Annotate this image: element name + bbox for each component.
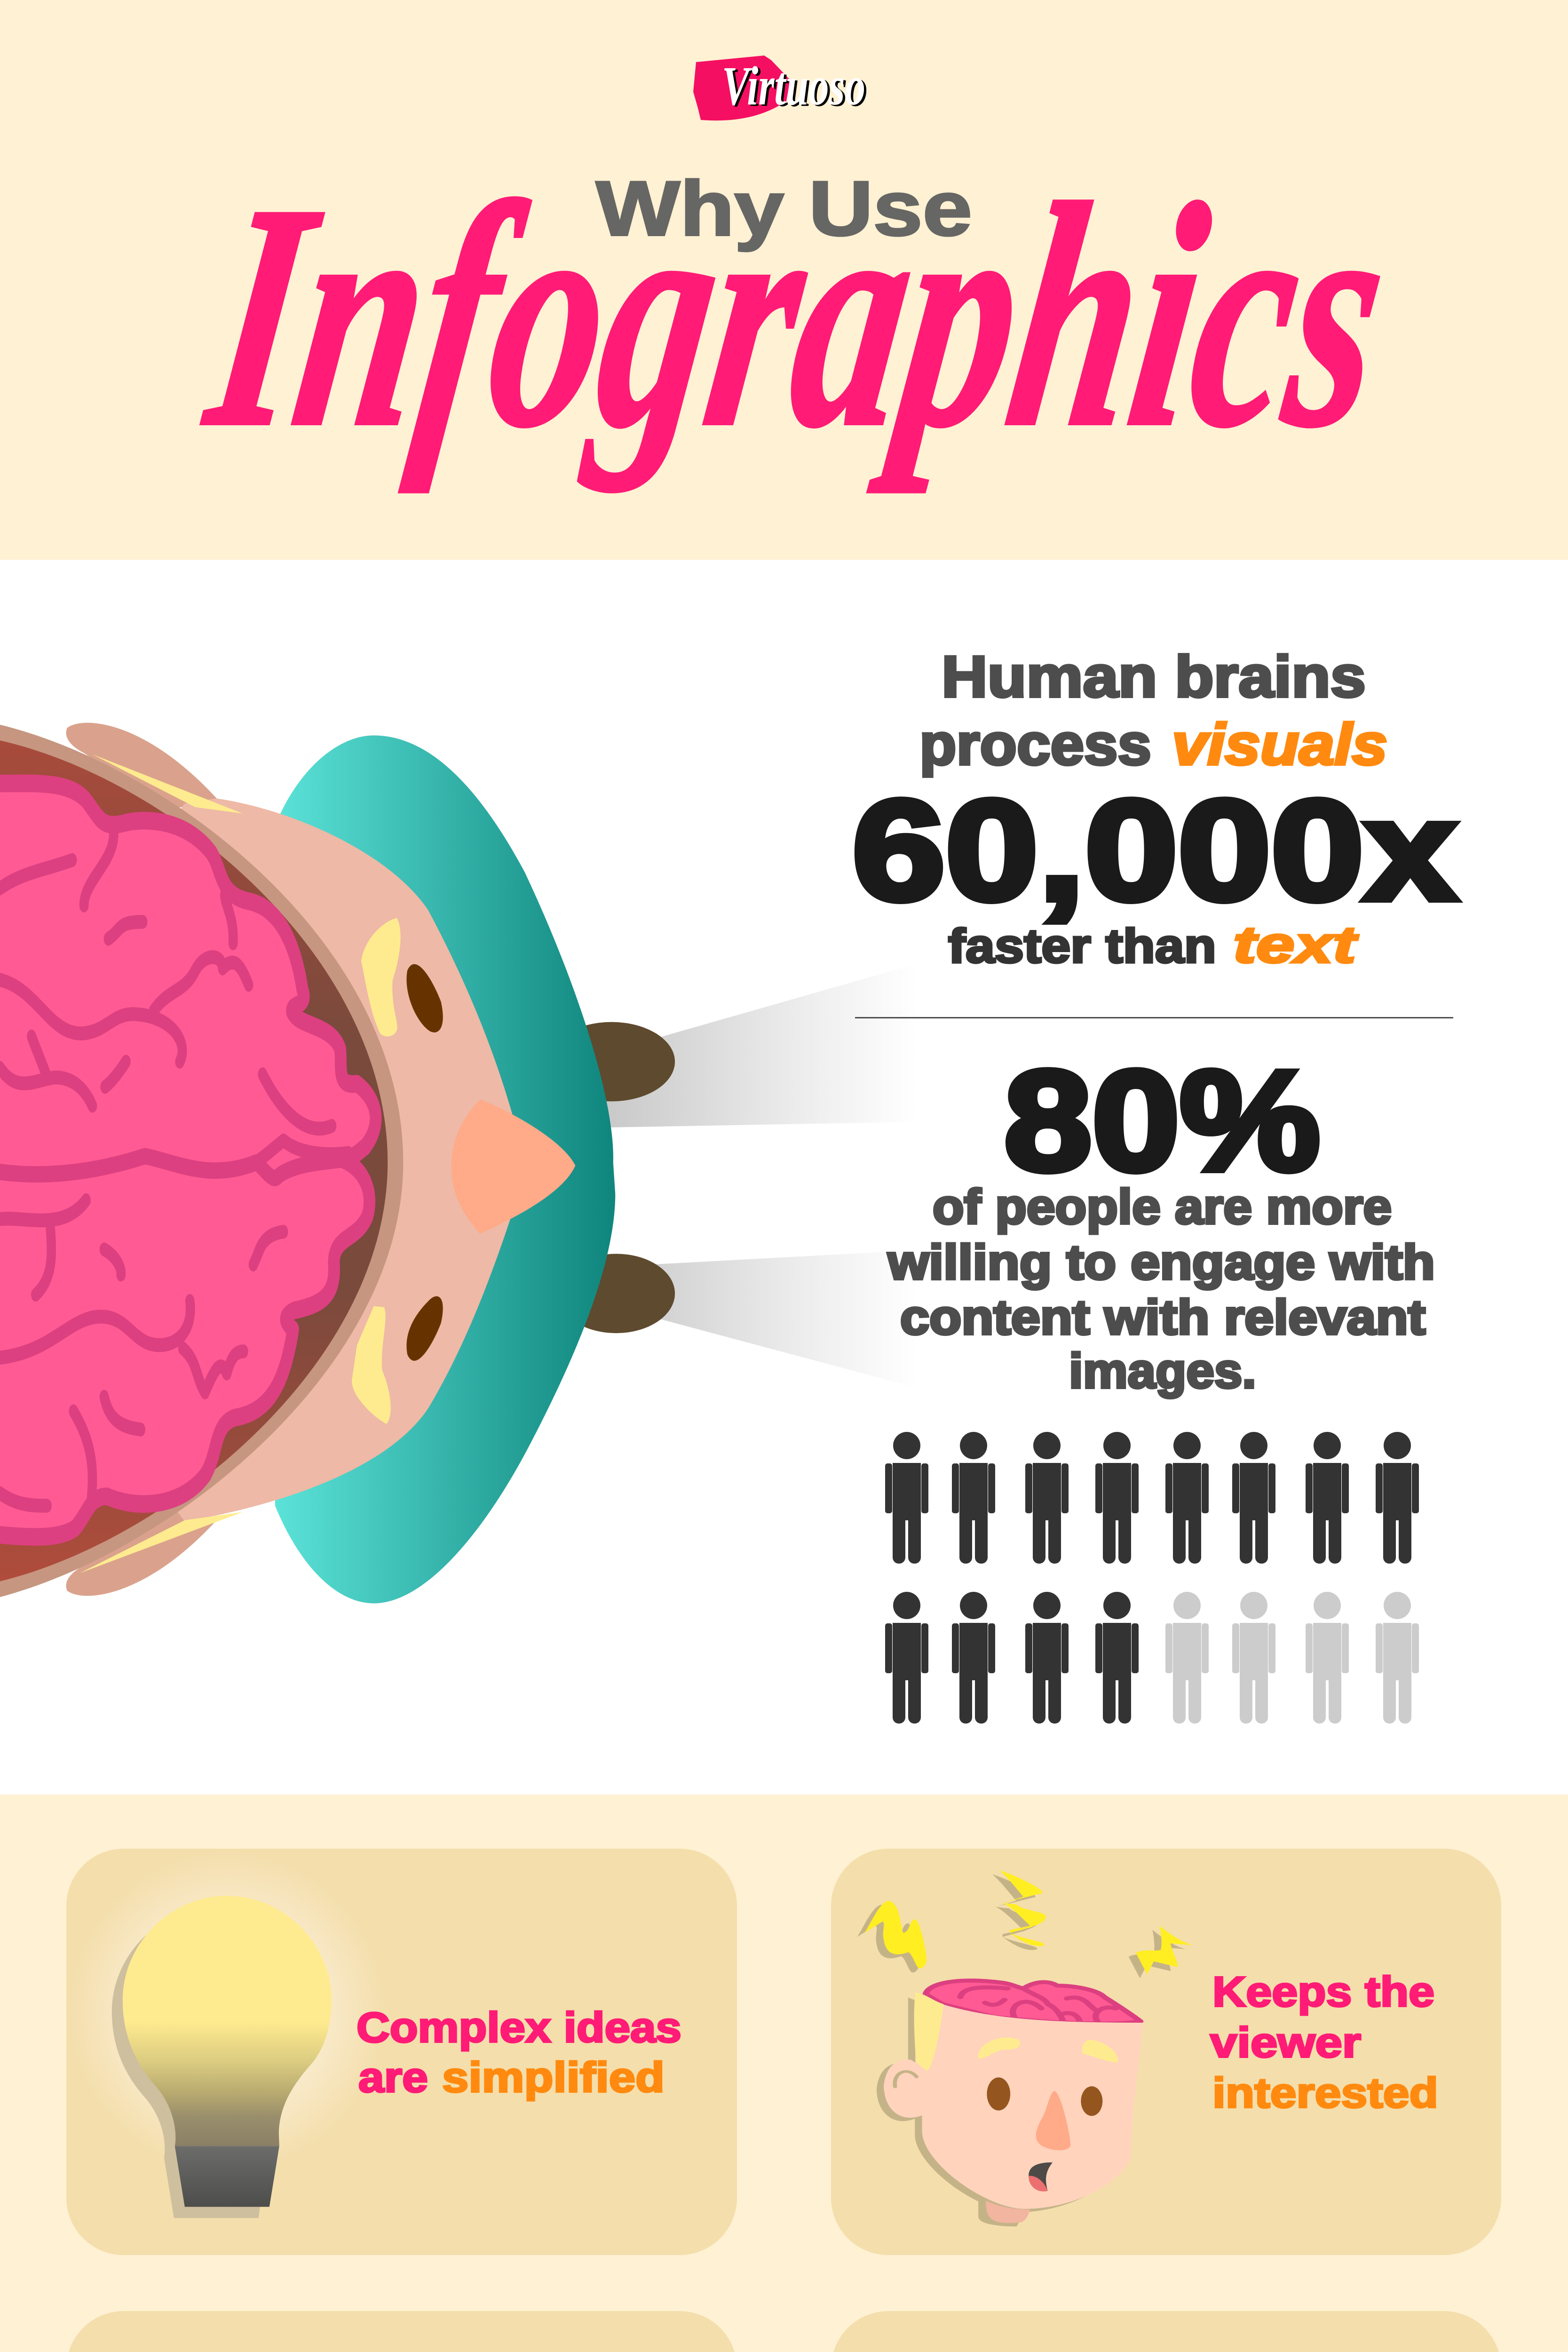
hair cap, teal (275, 735, 615, 1603)
panel: transforms difficult subjects (831, 2311, 1501, 2352)
text: simplified (442, 2054, 665, 2101)
ears, brown (548, 1022, 675, 1333)
light beams from the ears (602, 964, 915, 1387)
brain (0, 783, 376, 1537)
stat: 80% of people: images. (1069, 1344, 1256, 1398)
nose (451, 1099, 575, 1234)
icon: head with open brain and lightning bolts (857, 1870, 1193, 2226)
logo: Virtuoso (693, 55, 865, 120)
text: are (358, 2054, 428, 2101)
icon: light bulb (69, 1851, 386, 2218)
stat: 80% of people: 80% (1004, 1041, 1320, 1200)
panel: potential to go viral (66, 2311, 737, 2352)
text: viewer (1210, 2019, 1361, 2066)
stat: 60,000x faster (852, 644, 1458, 974)
skull interior (0, 740, 388, 1581)
eyes (406, 964, 443, 1361)
eyebrows (352, 918, 401, 1424)
stat: 60,000x faster: Human brains (942, 644, 1366, 709)
text: interested (1212, 2070, 1438, 2117)
panel: complex ideas (66, 1849, 737, 2255)
stat: 80% of people: content with relevant (900, 1290, 1425, 1345)
stat: 80% of people: of people are more (933, 1180, 1392, 1234)
stat: 60,000x faster: process (919, 712, 1151, 777)
face (105, 798, 519, 1521)
stat: 80% of people: willing to engage with (887, 1235, 1435, 1290)
panel: keeps the viewer interested (831, 1849, 1501, 2255)
stat: 60,000x faster: visuals (1172, 712, 1387, 777)
white statistics band (0, 560, 1568, 1795)
illustration: head seen from above with brain (0, 723, 675, 1603)
text: Complex ideas (356, 2004, 681, 2051)
heading: Why Use: Why Use (596, 165, 972, 252)
text: Keeps the (1212, 1969, 1434, 2016)
logo: Virtuoso: Virtuoso (722, 55, 865, 117)
pictogram: 12 of 16 people dark (885, 1432, 1419, 1724)
stat: 60,000x faster: 60,000x (852, 771, 1458, 930)
stat: 60,000x faster: faster than (948, 919, 1216, 973)
stat: 80% of people (887, 1041, 1435, 1398)
stat: 60,000x faster: text (1233, 916, 1359, 974)
side ears, pink (66, 723, 218, 1596)
hair strips, yellow (80, 755, 243, 1573)
text (1210, 1969, 1438, 2117)
skull rim (0, 725, 403, 1597)
text (356, 2004, 681, 2101)
